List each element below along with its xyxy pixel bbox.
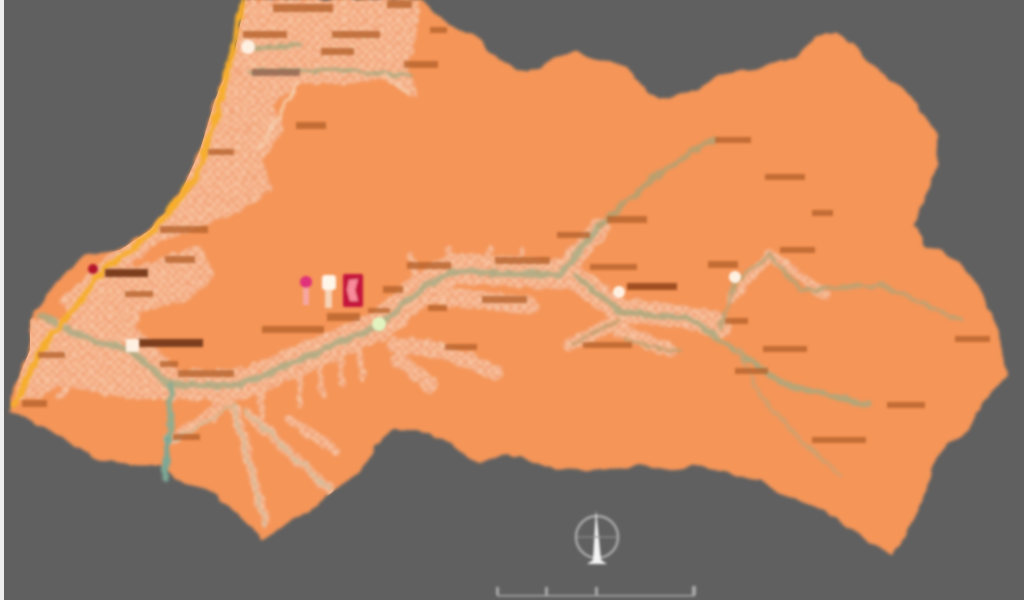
place labels, illegible in the reference (22, 0, 990, 443)
marker: green site (372, 317, 386, 331)
hatched zones (15, 0, 825, 520)
marker: red town dot (88, 264, 98, 274)
icon: north arrow (576, 510, 618, 564)
hatched coastal and northern zone (60, 0, 420, 350)
marker: red framed site (343, 274, 363, 307)
marker: pink site (300, 276, 312, 305)
marker: white site (322, 275, 336, 308)
scale bar (496, 586, 696, 596)
hatched river corridors (60, 228, 825, 520)
settlement and site markers (88, 40, 741, 352)
coastline road (14, 0, 243, 406)
marker: white towns (126, 40, 741, 352)
hatched lower-left zone (15, 320, 178, 400)
left edge strip (0, 0, 4, 600)
